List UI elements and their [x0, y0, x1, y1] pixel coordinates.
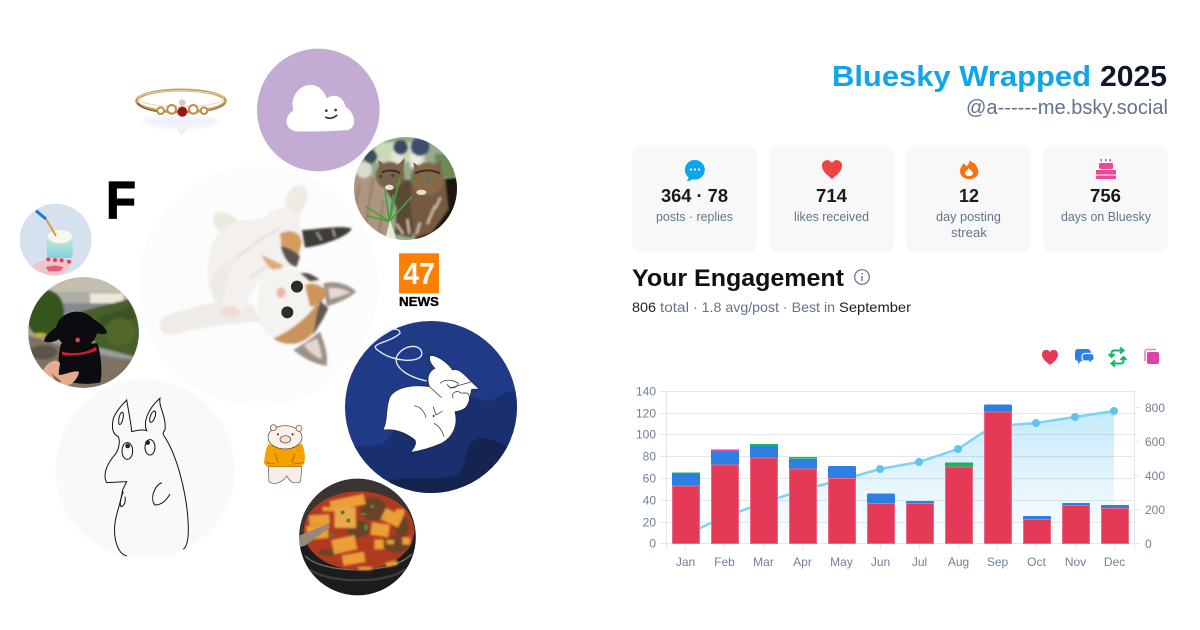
month labels: Nov	[1065, 555, 1086, 569]
avatar: pig in orange sweater	[264, 425, 305, 483]
chart: monthly engagement	[636, 384, 1165, 569]
right axis labels: 0	[1145, 537, 1152, 551]
engagement summary: 806	[632, 299, 656, 315]
engagement summary: September	[839, 299, 911, 315]
icon: flame	[960, 160, 978, 179]
left axis labels	[636, 384, 656, 550]
cumulative area	[685, 411, 1114, 544]
icon: speech bubble	[685, 160, 705, 181]
stat card: day posting streak: 12	[959, 186, 979, 206]
right axis labels	[1145, 401, 1165, 551]
left axis labels: 60	[643, 472, 656, 486]
engagement summary	[632, 299, 911, 315]
left axis labels: 20	[643, 516, 656, 530]
icon: birthday cake	[1096, 159, 1116, 179]
month labels: Sep	[987, 555, 1008, 569]
avatar: calico kitten	[138, 166, 378, 406]
engagement summary: · 1.8 avg/post · Best in	[693, 299, 835, 315]
stat card: likes received	[769, 145, 894, 253]
avatar: two tabby cats	[353, 136, 460, 244]
avatar: 47 News logo: NEWS	[399, 294, 439, 309]
month labels: Apr	[793, 555, 812, 569]
icon: info	[855, 270, 869, 284]
right axis labels: 400	[1145, 469, 1165, 483]
stat card: days on Bluesky	[1043, 145, 1168, 253]
left axis labels: 100	[636, 428, 656, 442]
kitten figure	[160, 185, 356, 366]
avatar cluster	[20, 49, 518, 596]
right axis labels: 800	[1145, 401, 1165, 415]
icon: likes	[1042, 350, 1058, 365]
stat card: day posting streak: streak	[951, 226, 988, 240]
chart legend	[1042, 348, 1159, 366]
left axis labels: 120	[636, 406, 656, 420]
month labels: May	[830, 555, 853, 569]
avatar: Moomin-like line drawing	[55, 379, 235, 559]
icon: reposts	[1108, 348, 1126, 366]
month labels: Dec	[1104, 555, 1125, 569]
left axis labels: 140	[636, 384, 656, 398]
avatar: letter F logo: F	[106, 172, 136, 230]
stat card: likes received: 714	[816, 186, 847, 206]
avatar: mapo tofu bowl	[298, 477, 417, 596]
user handle: @a------me.bsky.social	[966, 97, 1168, 119]
avatar: black plush dog photo	[26, 277, 142, 390]
month labels: Oct	[1027, 555, 1046, 569]
engagement summary: total	[660, 299, 689, 315]
month labels	[676, 555, 1125, 569]
month labels: Jun	[871, 555, 890, 569]
character body	[383, 356, 479, 452]
month labels: Mar	[753, 555, 774, 569]
title: 2025	[1100, 61, 1167, 93]
stat card: days on Bluesky: days on Bluesky	[1061, 210, 1152, 224]
month labels: Jan	[676, 555, 695, 569]
icon: quotes	[1145, 350, 1159, 364]
avatar: 47 News logo	[399, 253, 439, 309]
cumulative line	[685, 407, 1118, 535]
month labels: Jul	[912, 555, 927, 569]
avatar: 47 News logo: 47	[403, 256, 435, 291]
avatar: lavender cloud	[257, 49, 380, 171]
gridlines and axes	[660, 391, 1140, 549]
icon: replies	[1075, 349, 1094, 364]
stat card: posts and replies: posts · replies	[656, 210, 733, 224]
left axis labels: 0	[649, 536, 656, 550]
right axis labels: 600	[1145, 435, 1165, 449]
stat card: day posting streak	[906, 145, 1031, 253]
month labels: Feb	[714, 555, 735, 569]
right axis labels: 200	[1145, 503, 1165, 517]
kitten backdrop circle	[138, 166, 378, 406]
avatar: navy circle with white character	[345, 321, 518, 493]
heading: Your Engagement: Your Engagement	[632, 265, 844, 292]
left axis labels: 80	[643, 450, 656, 464]
month labels: Aug	[948, 555, 969, 569]
stat card: day posting streak: day posting	[936, 210, 1001, 224]
left axis labels: 40	[643, 494, 656, 508]
avatar: drink photo	[20, 204, 92, 277]
avatar: gold ring	[137, 90, 225, 136]
stat card: likes received: likes received	[794, 210, 869, 224]
stat card: posts and replies: 364 · 78	[661, 186, 728, 206]
stat card: posts and replies	[632, 145, 757, 253]
stacked bars	[672, 404, 1129, 544]
icon: heart	[822, 160, 842, 179]
title: Bluesky Wrapped	[832, 61, 1091, 93]
stat card: days on Bluesky: 756	[1090, 186, 1121, 206]
